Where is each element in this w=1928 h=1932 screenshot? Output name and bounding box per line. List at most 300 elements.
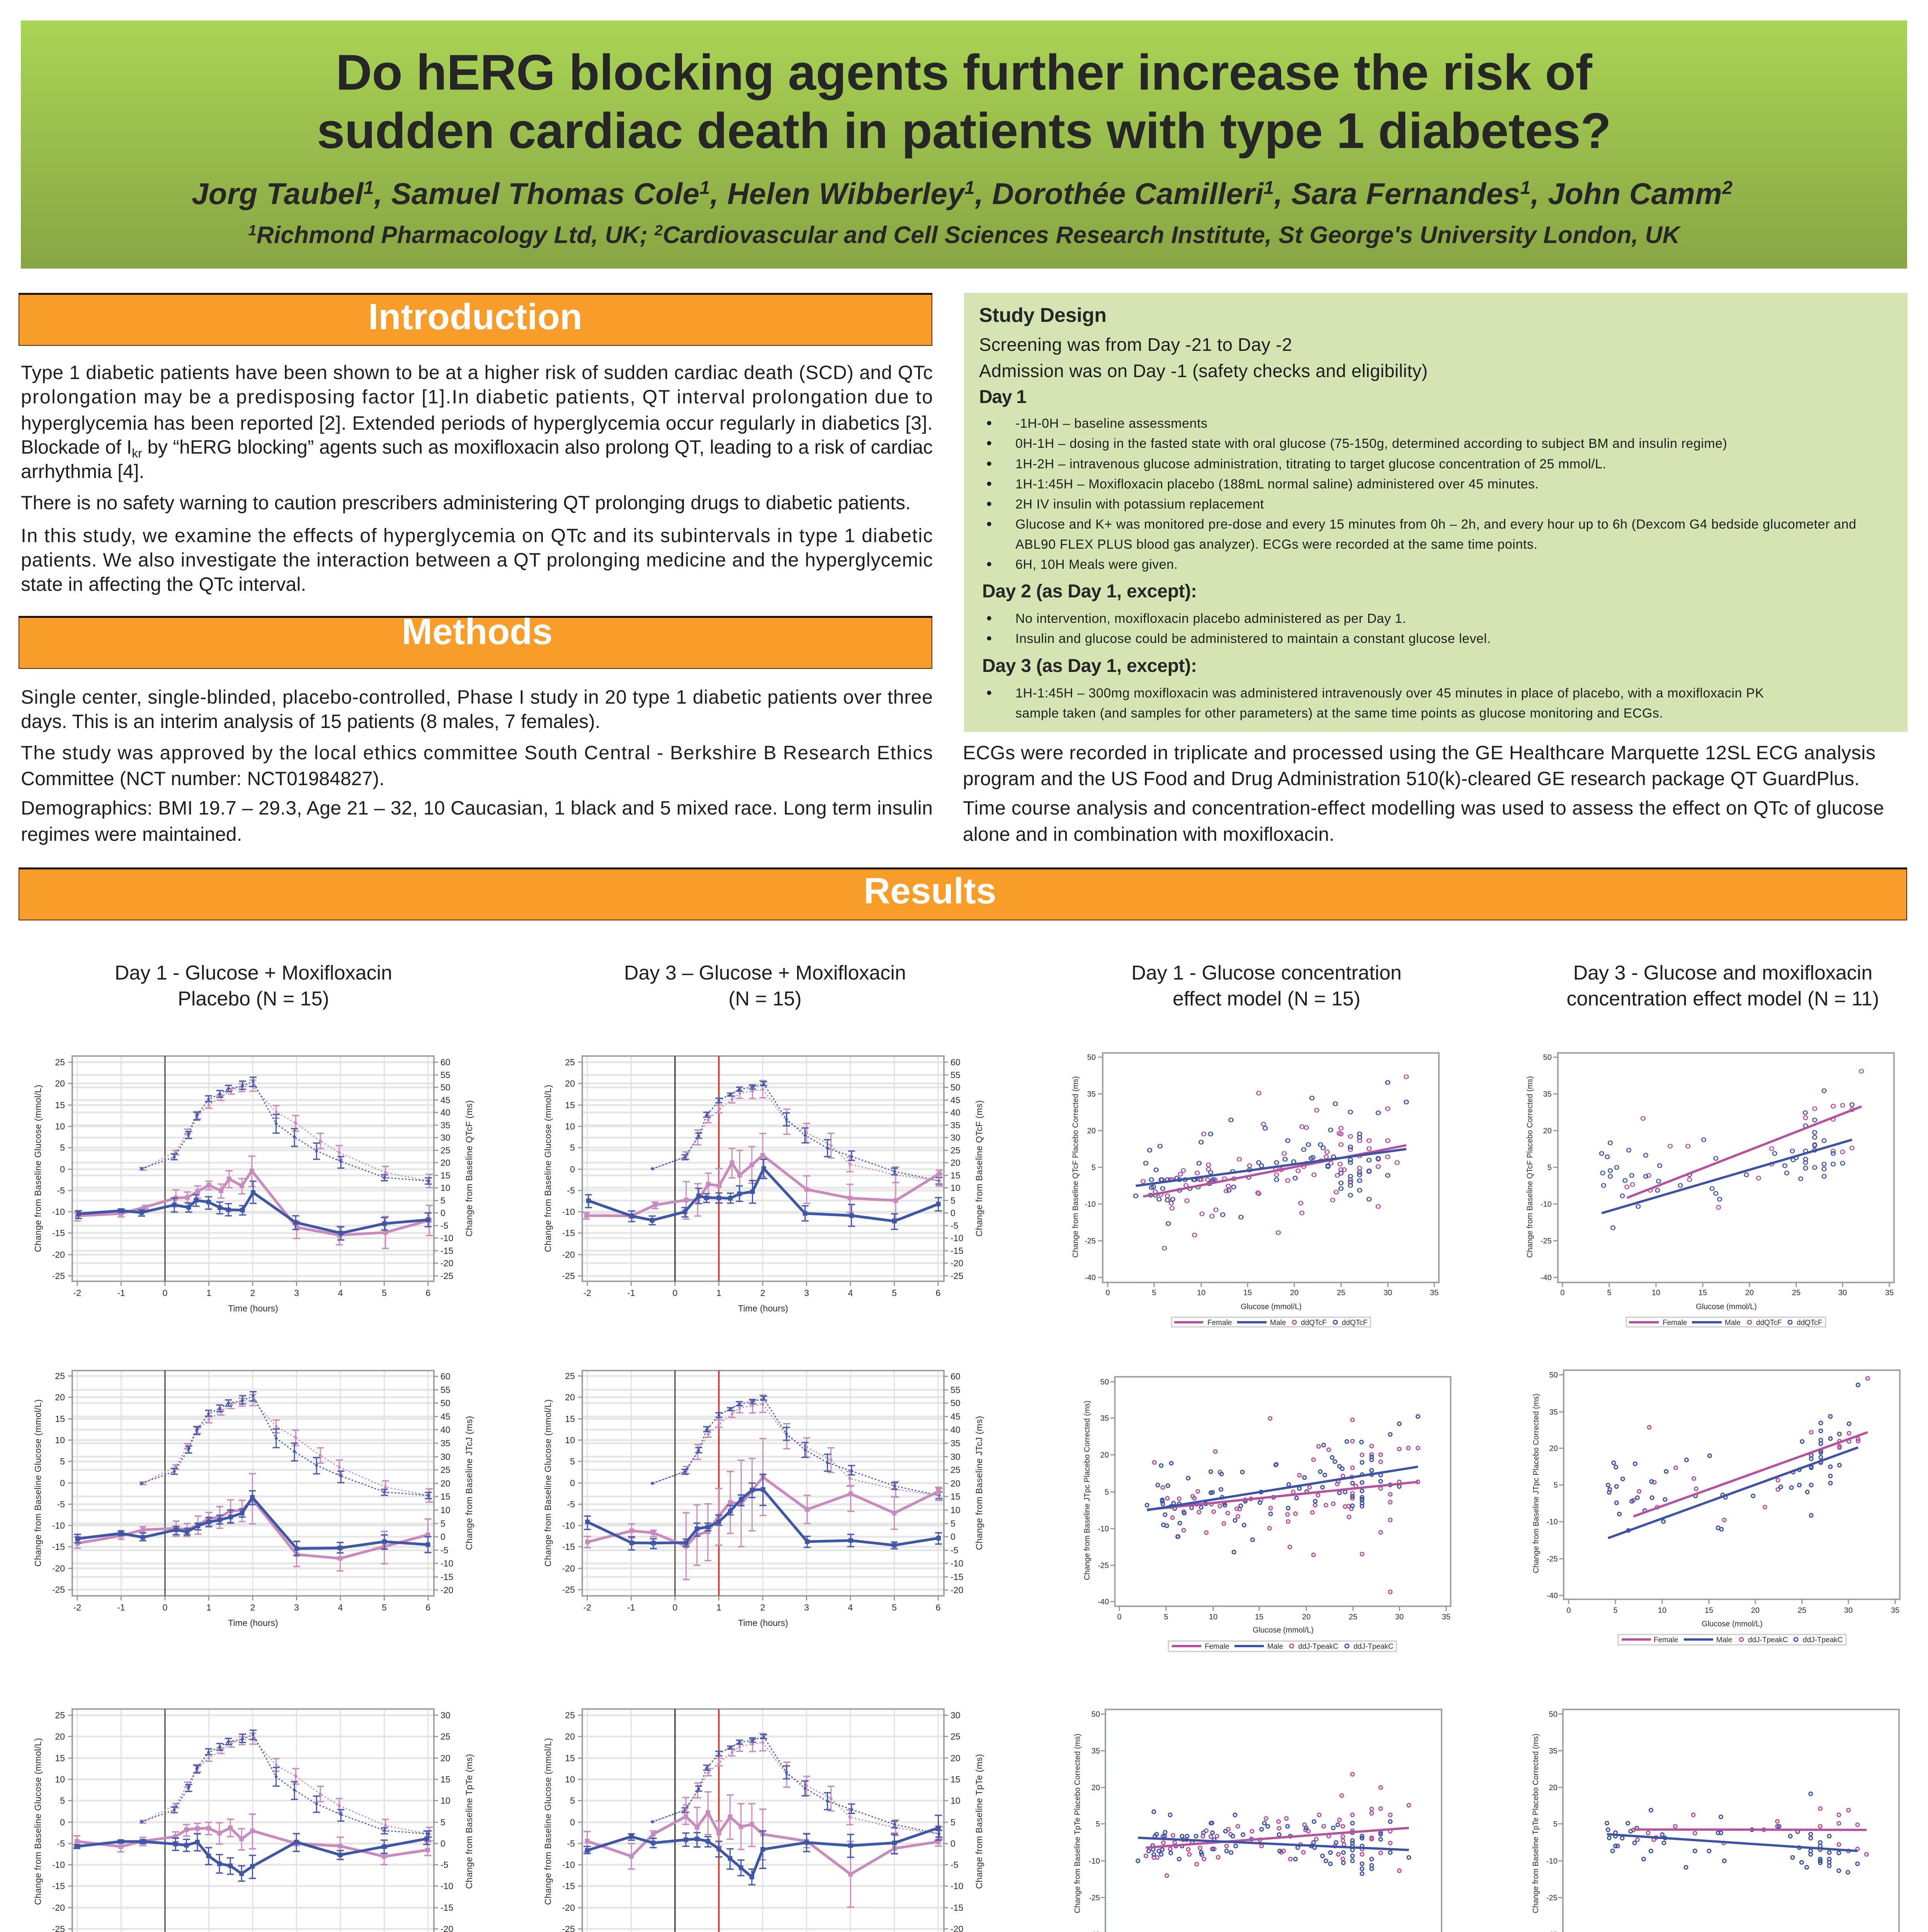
axis labels: -5 — [950, 1221, 958, 1231]
list: day 2: Insulin and glucose could be administered to maintain a constant glucose level. — [1015, 631, 1491, 646]
axis labels: -15 — [440, 1246, 453, 1256]
axis labels: Change from Baseline JTpc Placebo Corrected (ms) — [1083, 1400, 1092, 1580]
axis labels: 5 — [950, 1817, 955, 1827]
axis labels: 60 — [440, 1057, 451, 1067]
authors: , Sara Fernandes — [1274, 177, 1520, 211]
axis labels: 55 — [950, 1385, 961, 1395]
axis labels: 25 — [55, 1371, 65, 1381]
chart: day 3 JTcJ time course — [543, 1371, 984, 1628]
axis labels: 5 — [570, 1796, 575, 1806]
column headings: Day 3 - Glucose and moxifloxacin — [1573, 962, 1872, 984]
axis labels: -40 — [1098, 1598, 1109, 1606]
text: methods body — [21, 686, 933, 845]
text: introduction body: state in affecting the QTc interval. — [21, 573, 306, 595]
axis labels — [543, 1371, 984, 1628]
axis labels: 0 — [950, 1532, 955, 1542]
axis labels: 0 — [440, 1208, 445, 1218]
axis labels: 3 — [294, 1602, 299, 1612]
axis labels: 30 — [1395, 1613, 1404, 1621]
axis labels: 5 — [570, 1143, 575, 1153]
axis labels: Time (hours) — [738, 1618, 788, 1628]
axis labels: 35 — [1442, 1613, 1450, 1621]
axis labels: Change from Baseline TpTe Placebo Corrected (ms) — [1532, 1733, 1540, 1913]
column headings: (N = 15) — [728, 988, 802, 1010]
chart: day 1 QTcF time course — [33, 1056, 474, 1313]
axis labels: 0 — [950, 1838, 955, 1849]
list: day 1: 0H-1H – dosing in the fasted state with oral glucose (75-150g, determined according to subject BM and insulin regime) — [1015, 436, 1727, 451]
axis labels: 45 — [440, 1095, 451, 1105]
axis labels: 50 — [1092, 1710, 1100, 1719]
axis labels: -15 — [52, 1881, 65, 1891]
legend: ddJ-TpeakC — [1803, 1636, 1843, 1644]
axis labels: 30 — [440, 1710, 451, 1720]
axis labels: 5 — [1096, 1820, 1100, 1828]
list: day 3: sample taken (and samples for other parameters) at the same time points as glucose monitoring and ECGs. — [1015, 706, 1663, 721]
axis labels: -10 — [440, 1881, 453, 1891]
axis labels: 20 — [1549, 1444, 1558, 1453]
axis labels: -25 — [562, 1585, 575, 1595]
axis labels: 25 — [1349, 1613, 1357, 1621]
axis labels: 2 — [250, 1288, 255, 1298]
axis labels: -20 — [562, 1563, 575, 1573]
list: day 2: No intervention, moxifloxacin placebo administered as per Day 1. — [1015, 611, 1406, 626]
axis labels: 60 — [440, 1371, 451, 1381]
panel: methods — [19, 611, 933, 845]
axis labels: -1 — [117, 1602, 125, 1612]
axis labels: 5 — [1613, 1606, 1618, 1615]
axis labels: 30 — [1844, 1606, 1853, 1615]
header banner — [21, 20, 1907, 269]
axis labels — [1083, 1378, 1450, 1634]
axis labels: -10 — [1085, 1200, 1096, 1209]
axis labels: Time (hours) — [228, 1618, 278, 1628]
axis labels: -15 — [52, 1228, 65, 1238]
axis labels: 20 — [950, 1478, 961, 1488]
axis labels: -15 — [440, 1903, 453, 1913]
authors: 1 — [1520, 178, 1530, 198]
axis labels: 25 — [55, 1710, 65, 1720]
axis labels: -40 — [1085, 1274, 1096, 1282]
data series means — [587, 1439, 938, 1580]
title: Do hERG blocking agents further increase the risk of — [336, 44, 1593, 100]
axis labels: Time (hours) — [228, 1303, 278, 1313]
axis labels: 5 — [1092, 1163, 1096, 1172]
axis labels: 0 — [60, 1164, 65, 1174]
axis labels: 50 — [1087, 1053, 1096, 1062]
axis labels — [1532, 1371, 1899, 1628]
axis labels: 40 — [440, 1107, 451, 1117]
axis labels: 10 — [1197, 1289, 1205, 1297]
text: introduction body: Type 1 diabetic patients have been shown to be at a higher risk of sudden cardiac death (SCD) and QTc — [21, 362, 933, 383]
axis labels: 10 — [55, 1774, 65, 1784]
axis labels: 10 — [55, 1435, 65, 1445]
scatter points and fit lines — [1607, 1794, 1867, 1872]
axis labels: Change from Baseline Glucose (mmol/L) — [33, 1085, 43, 1252]
axis labels: 5 — [570, 1456, 575, 1466]
axis labels: 10 — [1658, 1606, 1666, 1615]
heading: methods — [19, 611, 932, 668]
text: methods body: Demographics: BMI 19.7 – 29.3, Age 21 – 32, 10 Caucasian, 1 black and 5 mixed race. Long term insulin — [21, 797, 933, 819]
axis labels: -10 — [1547, 1518, 1558, 1526]
chart: day 1 glucose vs QTcF scatter — [1071, 1053, 1439, 1327]
axis labels: 5 — [950, 1196, 955, 1206]
axis labels: 0 — [1105, 1289, 1110, 1297]
axis labels: -2 — [583, 1602, 591, 1612]
axis labels: -15 — [562, 1542, 575, 1552]
axis labels — [543, 1057, 984, 1313]
axis labels: 45 — [440, 1412, 451, 1422]
axis labels: -15 — [950, 1246, 963, 1256]
axis labels: 4 — [848, 1288, 853, 1298]
axis labels: -2 — [73, 1602, 81, 1612]
authors: , John Camm — [1530, 177, 1722, 211]
axis labels: 55 — [440, 1070, 451, 1080]
axis labels: 30 — [440, 1133, 451, 1143]
legend: Female — [1663, 1319, 1687, 1327]
scatter points and fit lines — [1138, 1774, 1409, 1876]
chart: day 3 TpTe time course — [543, 1709, 984, 1932]
axis labels: Glucose (mmol/L) — [1241, 1303, 1302, 1311]
axis labels: 6 — [936, 1602, 940, 1612]
list: day 2 — [989, 611, 1491, 646]
axis labels: 50 — [440, 1082, 451, 1092]
heading: day 2: Day 2 (as Day 1, except): — [982, 581, 1197, 602]
axis labels: 55 — [440, 1385, 451, 1395]
text: methods body: Committee (NCT number: NCT01984827). — [21, 768, 384, 789]
axis labels: 30 — [950, 1133, 961, 1143]
axis labels: 0 — [673, 1288, 677, 1298]
axis labels: 15 — [950, 1774, 961, 1784]
axis labels: 10 — [565, 1774, 575, 1784]
chart: day 1 TpTe time course — [33, 1709, 474, 1932]
axis labels: 20 — [1543, 1127, 1552, 1135]
axis labels: 20 — [565, 1078, 575, 1088]
axis labels: 25 — [565, 1710, 575, 1720]
axis labels: 25 — [950, 1731, 961, 1742]
axis labels: 35 — [1549, 1747, 1557, 1755]
scatter points and fit lines — [1136, 1077, 1406, 1248]
axis labels: 15 — [440, 1170, 451, 1180]
authors: Jorg Taubel — [192, 177, 363, 211]
axis labels: 10 — [1652, 1289, 1660, 1297]
axis labels: 2 — [760, 1288, 765, 1298]
axis labels: 6 — [936, 1288, 940, 1298]
axis labels — [33, 1710, 474, 1932]
axis labels: 40 — [440, 1425, 451, 1435]
axis labels: -15 — [950, 1572, 963, 1582]
data series — [142, 1392, 429, 1502]
axis labels: 25 — [1798, 1606, 1806, 1615]
title — [317, 44, 1611, 159]
chart: day 3 QTcF time course — [543, 1056, 984, 1313]
axis labels: 4 — [848, 1602, 853, 1612]
axis labels: Change from Baseline TpTe (ms) — [464, 1754, 474, 1889]
axis labels: 15 — [440, 1492, 451, 1502]
axis labels: 20 — [1092, 1784, 1100, 1792]
axis labels: -5 — [57, 1499, 65, 1509]
legend — [1626, 1317, 1826, 1327]
text: introduction body: prolongation may be a predisposing factor [1].In diabetic patients, QT interval prolongation due to — [21, 386, 933, 408]
axis labels: -40 — [1540, 1274, 1552, 1282]
axis labels: 0 — [570, 1478, 575, 1488]
axis labels: 1 — [716, 1288, 721, 1298]
axis labels: 2 — [760, 1602, 765, 1612]
axis labels: 1 — [716, 1602, 721, 1612]
legend — [1618, 1634, 1846, 1645]
legend: Female — [1205, 1643, 1229, 1651]
axis labels: 25 — [565, 1371, 575, 1381]
axis labels: -20 — [52, 1250, 65, 1260]
axis labels — [1071, 1053, 1438, 1311]
axis labels: 5 — [892, 1602, 897, 1612]
legend — [1171, 1317, 1370, 1327]
authors: 2 — [1722, 178, 1732, 198]
axis labels: 10 — [1209, 1613, 1217, 1621]
heading: day 3: Day 3 (as Day 1, except): — [982, 656, 1197, 676]
axis labels: 25 — [1337, 1289, 1345, 1297]
text: methods body: The study was approved by the local ethics committee South Central - Berkshire B Research Ethics — [21, 742, 933, 764]
axis labels: 20 — [1290, 1289, 1299, 1297]
axis labels: 3 — [804, 1288, 809, 1298]
text: introduction body: Blockade of I — [21, 436, 132, 458]
list: day 1: ABL90 FLEX PLUS blood gas analyzer). ECGs were recorded at the same time points. — [1015, 537, 1537, 552]
scatter points and fit lines — [1608, 1378, 1868, 1538]
axis labels: 5 — [1164, 1613, 1168, 1621]
axis labels: 50 — [1100, 1378, 1109, 1386]
axis labels: 35 — [440, 1120, 451, 1130]
axis labels: 25 — [440, 1465, 451, 1475]
axis labels: 15 — [950, 1492, 961, 1502]
axis labels: 25 — [950, 1145, 961, 1155]
data series — [652, 1395, 939, 1500]
axis labels: 40 — [950, 1107, 961, 1117]
axis labels: -25 — [562, 1271, 575, 1281]
axis labels: Change from Baseline Glucose (mmol/L) — [33, 1738, 43, 1905]
authors: , Helen Wibberley — [710, 177, 966, 211]
data series means — [587, 1792, 938, 1907]
axis labels: -10 — [562, 1860, 575, 1870]
axis labels: -25 — [52, 1585, 65, 1595]
axis labels: -10 — [950, 1881, 963, 1891]
axis labels: -25 — [950, 1271, 963, 1281]
axis labels: -10 — [562, 1207, 575, 1217]
axis labels: -10 — [1089, 1857, 1100, 1866]
axis labels: Change from Baseline JTpc Placebo Corrected (ms) — [1532, 1393, 1540, 1573]
axis labels: -10 — [1098, 1525, 1109, 1533]
axis labels: 10 — [440, 1183, 451, 1193]
axis labels: -15 — [52, 1542, 65, 1552]
axis labels: 20 — [440, 1478, 451, 1488]
axis labels: 20 — [1100, 1451, 1109, 1459]
axis labels: 10 — [565, 1435, 575, 1445]
axis labels: 15 — [55, 1753, 65, 1763]
data series means — [77, 1814, 428, 1881]
axis labels: 5 — [440, 1817, 445, 1827]
axis labels: 0 — [570, 1164, 575, 1174]
axis labels: 20 — [565, 1392, 575, 1402]
axis labels: Change from Baseline Glucose (mmol/L) — [543, 1738, 553, 1905]
axis labels: -25 — [1546, 1894, 1557, 1902]
axis labels: -10 — [1540, 1200, 1552, 1209]
column headings — [115, 962, 1879, 1010]
axis labels: 3 — [294, 1288, 299, 1298]
text: introduction body: hyperglycemia has been reported [2]. Extended periods of hyperglycemia occur regularly in diabetics [3]. — [21, 412, 933, 434]
axis labels: -15 — [950, 1903, 963, 1913]
axis labels — [1073, 1710, 1441, 1932]
axis labels: 25 — [440, 1731, 451, 1742]
list: day 1: 1H-1:45H – Moxifloxacin placebo (188mL normal saline) administered over 45 minutes. — [1015, 477, 1539, 492]
axis labels: -25 — [1098, 1561, 1109, 1570]
axis labels: 35 — [440, 1438, 451, 1448]
axis labels: -15 — [562, 1228, 575, 1238]
axis labels: 0 — [1560, 1289, 1565, 1297]
axis labels: 25 — [565, 1057, 575, 1067]
legend: Female — [1654, 1636, 1678, 1644]
list: day 1: 6H, 10H Meals were given. — [1015, 557, 1178, 572]
axis labels: 5 — [892, 1288, 897, 1298]
axis labels — [33, 1371, 474, 1628]
axis labels: 55 — [950, 1070, 961, 1080]
axis labels: -25 — [52, 1271, 65, 1281]
axis labels: 5 — [440, 1519, 445, 1529]
axis labels: -5 — [440, 1545, 448, 1555]
legend: ddQTcF — [1301, 1319, 1327, 1327]
text: ECG processing and analysis: program and the US Food and Drug Administration 510(k)-cleared GE research package QT GuardPlus. — [963, 768, 1860, 789]
axis labels: -20 — [950, 1258, 963, 1268]
axis labels: 5 — [950, 1519, 955, 1529]
axis labels: -2 — [583, 1288, 591, 1298]
axis labels: -40 — [1547, 1592, 1558, 1600]
text: introduction body: by “hERG blocking” agents such as moxifloxacin also prolong QT, leading to a risk of cardiac — [142, 436, 933, 458]
list: day 1: -1H-0H – baseline assessments — [1015, 416, 1207, 431]
axis labels: 20 — [1745, 1289, 1754, 1297]
column headings: Placebo (N = 15) — [178, 988, 329, 1010]
axis labels: 0 — [163, 1602, 167, 1612]
axis labels: -20 — [52, 1563, 65, 1573]
column headings: Day 1 - Glucose + Moxifloxacin — [115, 962, 392, 984]
text: screening and admission — [979, 334, 1428, 381]
axis labels: -10 — [52, 1520, 65, 1531]
axis labels: Change from Baseline Glucose (mmol/L) — [33, 1400, 43, 1566]
axis labels: 10 — [440, 1505, 451, 1515]
axis labels: 5 — [382, 1288, 387, 1298]
affiliations: Richmond Pharmacology Ltd, UK; — [257, 222, 655, 248]
scatter points and fit lines — [1602, 1071, 1862, 1228]
axis labels: -1 — [627, 1288, 635, 1298]
axis labels: Change from Baseline JTcJ (ms) — [464, 1416, 474, 1550]
axis labels: Glucose (mmol/L) — [1702, 1620, 1763, 1628]
axis labels — [1532, 1710, 1898, 1932]
axis labels: 15 — [440, 1774, 451, 1784]
axis labels: -5 — [567, 1499, 575, 1509]
authors: 1 — [964, 178, 975, 198]
axis labels: 25 — [1792, 1289, 1800, 1297]
axis labels: -5 — [57, 1185, 65, 1196]
axis labels: 0 — [1117, 1613, 1122, 1621]
axis labels: -20 — [440, 1258, 453, 1268]
axis labels: 10 — [950, 1796, 961, 1806]
axis labels: 50 — [950, 1398, 961, 1408]
axis labels: 20 — [1302, 1613, 1311, 1621]
axis labels: 10 — [950, 1183, 961, 1193]
heading: study design: Study Design — [979, 304, 1107, 327]
column headings: effect model (N = 15) — [1173, 988, 1360, 1010]
axis labels: -5 — [440, 1860, 448, 1870]
axis labels: 45 — [950, 1412, 961, 1422]
axis labels: -20 — [562, 1250, 575, 1260]
chart: day 3 glucose vs QTcF scatter — [1526, 1053, 1894, 1327]
legend: ddQTcF — [1342, 1319, 1368, 1327]
axis labels: Time (hours) — [738, 1303, 788, 1313]
axis labels: 5 — [1554, 1481, 1558, 1490]
axis labels: 35 — [1430, 1289, 1438, 1297]
axis labels: 0 — [1566, 1606, 1571, 1615]
axis labels: 5 — [1607, 1289, 1612, 1297]
axis labels: 6 — [426, 1288, 430, 1298]
text: methods body: regimes were maintained. — [21, 823, 242, 845]
axis labels: -5 — [950, 1860, 958, 1870]
authors: 1 — [364, 178, 374, 198]
axis labels: 3 — [804, 1602, 809, 1612]
axis labels: -10 — [562, 1520, 575, 1531]
axis labels: -20 — [440, 1585, 453, 1595]
axis labels — [543, 1710, 984, 1932]
axis labels: 20 — [55, 1392, 65, 1402]
axis labels: -20 — [950, 1585, 963, 1595]
axis labels: -15 — [440, 1572, 453, 1582]
text: ECG processing and analysis: alone and in combination with moxifloxacin. — [963, 823, 1335, 845]
legend: ddJ-TpeakC — [1353, 1643, 1393, 1651]
axis labels: 5 — [440, 1196, 445, 1206]
axis labels: 20 — [1751, 1606, 1760, 1615]
axis labels: 0 — [60, 1817, 65, 1827]
axis labels: -5 — [950, 1545, 958, 1555]
axis labels: -10 — [950, 1233, 963, 1243]
chart: day 3 glucose vs Tpeak-Tend scatter — [1532, 1709, 1899, 1932]
list: day 1: Glucose and K+ was monitored pre-dose and every 15 minutes from 0h – 2h, and every hour up to 6h (Dexcom G4 bedside glucometer and — [1015, 517, 1856, 532]
axis labels: -5 — [57, 1838, 65, 1849]
axis labels: Change from Baseline QTcF Placebo Corrected (ms) — [1071, 1076, 1080, 1258]
list: day 3 — [989, 686, 1764, 721]
legend: ddJ-TpeakC — [1748, 1636, 1788, 1644]
axis labels: -1 — [627, 1602, 635, 1612]
axis labels: 2 — [250, 1602, 255, 1612]
axis labels: 35 — [950, 1438, 961, 1448]
axis labels: 1 — [206, 1602, 211, 1612]
axis labels: 10 — [55, 1121, 65, 1131]
axis labels: 5 — [382, 1602, 387, 1612]
axis labels: 10 — [440, 1796, 451, 1806]
text: ECG processing and analysis: ECGs were recorded in triplicate and processed using the GE Healthcare Marquette 12SL ECG analysis — [963, 742, 1875, 764]
axis labels: -5 — [567, 1838, 575, 1849]
list: day 3: 1H-1:45H – 300mg moxifloxacin was administered intravenously over 45 minutes in place of placebo, with a moxifloxacin PK — [1015, 686, 1764, 701]
axis labels: -25 — [1540, 1237, 1552, 1245]
data series — [652, 1733, 939, 1839]
axis labels — [1526, 1053, 1894, 1311]
axis labels: 5 — [60, 1143, 65, 1153]
axis labels: Change from Baseline Glucose (mmol/L) — [543, 1400, 553, 1566]
legend: ddQTcF — [1756, 1319, 1782, 1327]
axis labels: 35 — [1543, 1090, 1552, 1099]
affiliations: 2 — [654, 223, 663, 239]
legend: Male — [1270, 1319, 1286, 1327]
heading: results: Results — [864, 871, 996, 912]
chart: day 1 JTcJ time course — [33, 1371, 474, 1628]
legend: Male — [1716, 1636, 1732, 1644]
axis labels: 4 — [338, 1602, 343, 1612]
list: day 1: 2H IV insulin with potassium replacement — [1015, 497, 1264, 512]
axis labels: -10 — [440, 1558, 453, 1568]
